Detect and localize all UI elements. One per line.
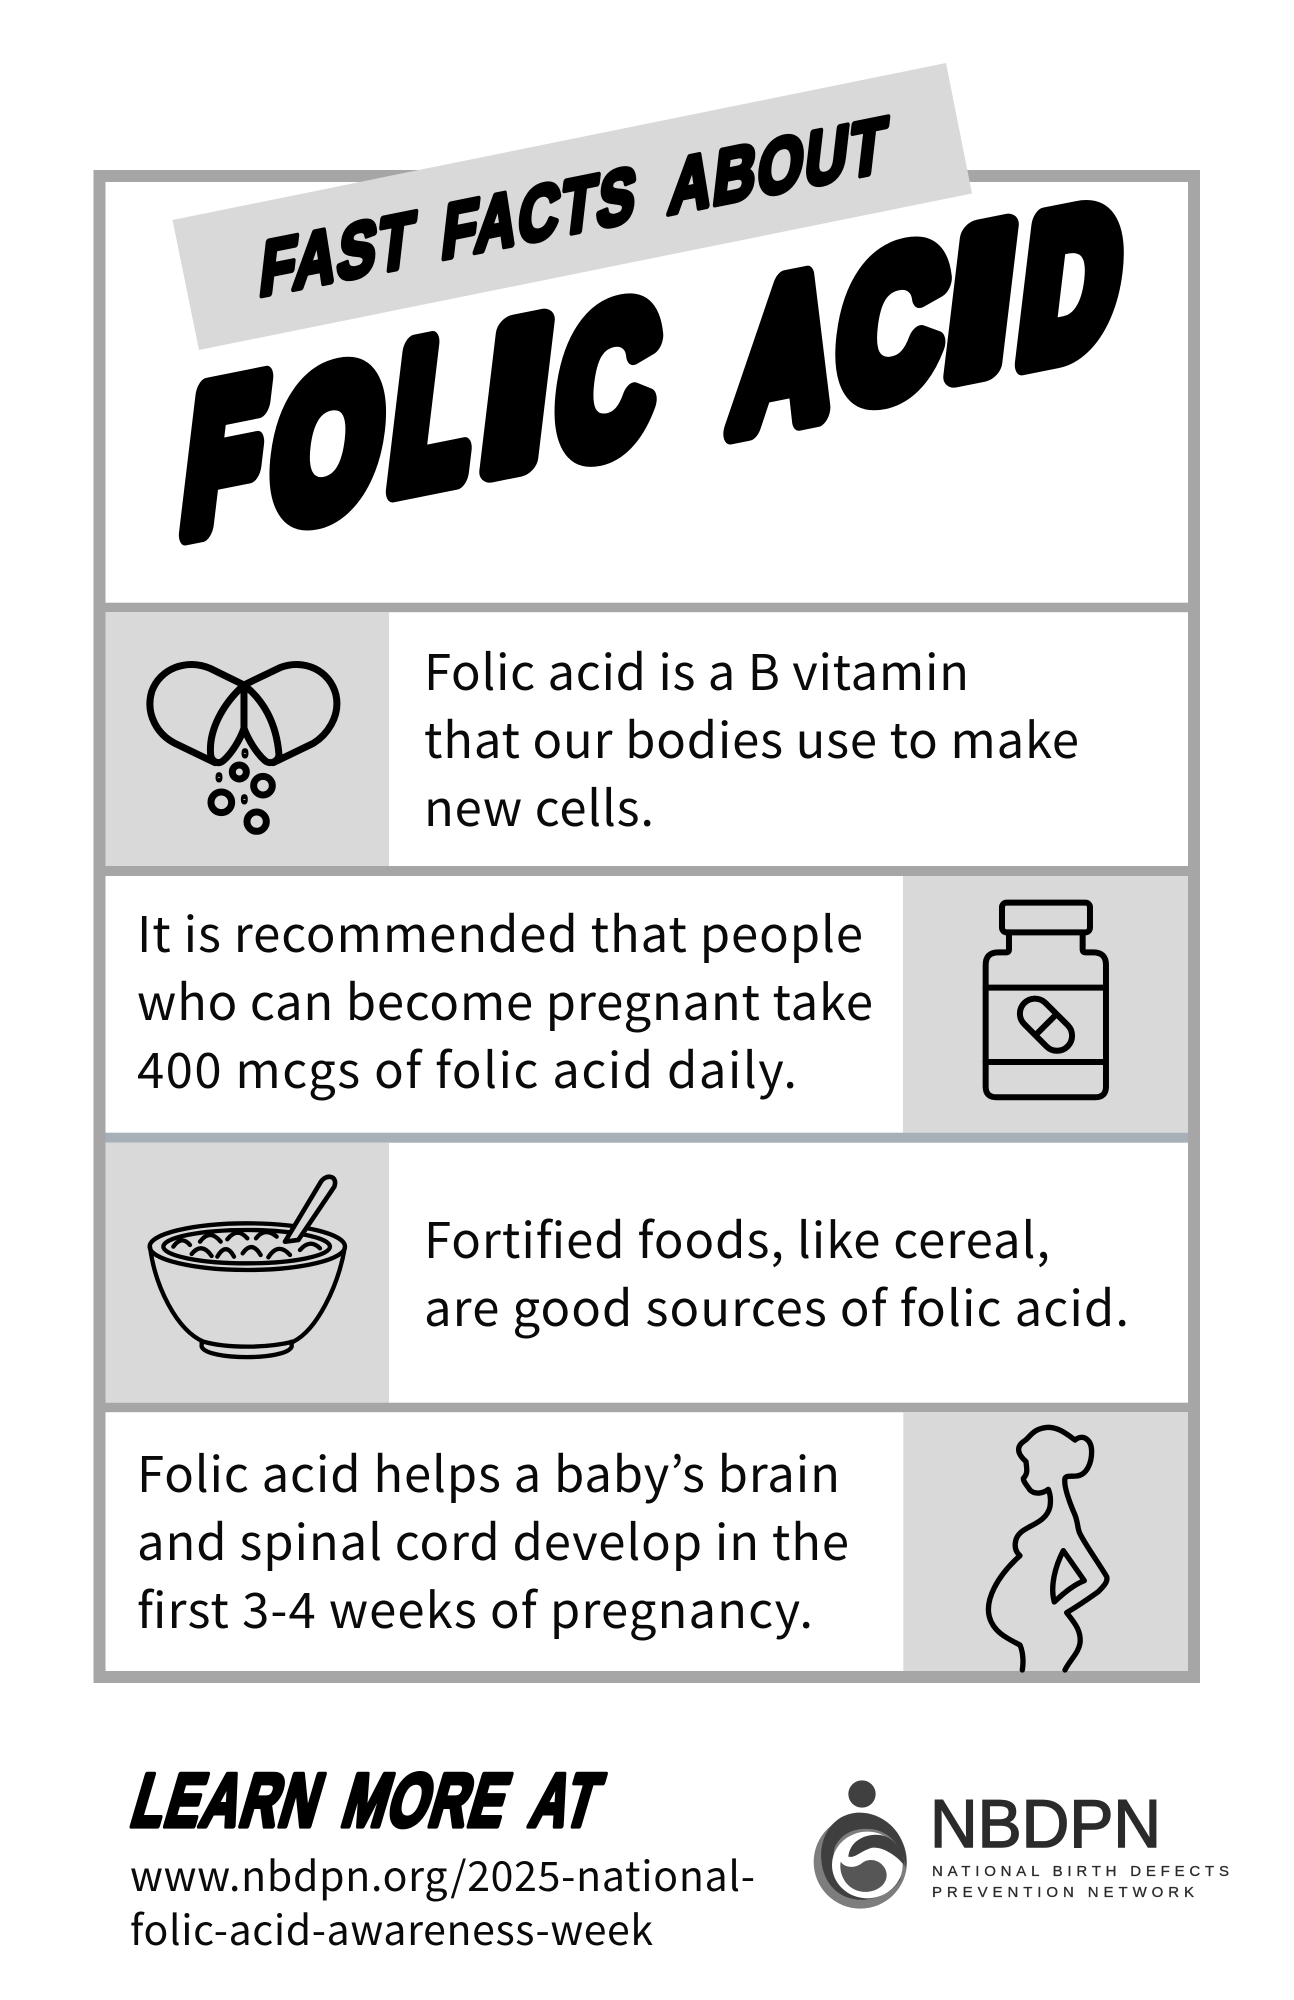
row 4: baby development fact (106, 1403, 1188, 1671)
text: fortified foods: are good sources of folic acid. (424, 1270, 1129, 1341)
footer: learn more (123, 1759, 755, 1957)
heading: folic acid: L (382, 292, 485, 532)
text: fortified foods: Fortified foods, like cereal, (424, 1202, 1050, 1273)
heading: learn more at: MORE (334, 1759, 521, 1843)
heading: learn more at: LEARN (123, 1759, 334, 1843)
text: B vitamin (424, 634, 1079, 841)
icon panel: bottle (903, 876, 1188, 1133)
heading: folic acid (175, 164, 1131, 575)
logo mark (814, 1780, 907, 1909)
banner: fast facts about: FACTS (438, 150, 643, 276)
outer frame (100, 176, 1194, 1677)
heading: learn more at (123, 1759, 613, 1843)
banner: fast facts about: FAST (256, 194, 421, 313)
title panel (172, 63, 1131, 575)
icon: pregnant silhouette (988, 1427, 1107, 1670)
icon panel: bowl (106, 1143, 389, 1403)
logo tagline: PREVENTION NETWORK (932, 1884, 1194, 1901)
icon: pill bottle (986, 903, 1106, 1097)
row 3: fortified foods fact (106, 1133, 1188, 1403)
text: B vitamin: that our bodies use to make (424, 702, 1079, 773)
text: baby development: Folic acid helps a baby’s brain (137, 1436, 840, 1507)
heading: folic acid: F (175, 338, 274, 575)
logo: NBDPN (814, 1780, 1229, 1909)
text: recommended dose: 400 mcgs of folic acid daily. (137, 1032, 797, 1103)
heading: learn more at: AT (522, 1759, 613, 1842)
heading: folic acid: D (1011, 164, 1131, 405)
link: web address (130, 1843, 755, 1957)
link: web address: www.nbdpn.org/2025-national- (130, 1843, 755, 1903)
heading: folic acid: C (547, 261, 667, 502)
text: fortified foods (424, 1202, 1129, 1341)
heading: folic acid: C (828, 202, 956, 445)
row 1: B vitamin fact (106, 603, 1188, 866)
text: recommended dose (137, 896, 873, 1103)
icon: cereal bowl (150, 1177, 345, 1357)
text: B vitamin: new cells. (424, 770, 654, 841)
icon: open capsule (150, 664, 337, 831)
text: recommended dose: It is recommended that people (137, 896, 863, 967)
link: web address: folic-acid-awareness-week (130, 1897, 653, 1957)
text: baby development: and spinal cord develop in the (137, 1504, 849, 1575)
logo tagline: NATIONAL BIRTH DEFECTS (932, 1863, 1229, 1880)
heading: folic acid: I (940, 183, 1022, 417)
banner: fast facts about (172, 63, 972, 350)
text: baby development (137, 1436, 849, 1643)
row 2: recommended dose fact (106, 866, 1188, 1133)
heading: folic acid: O (262, 321, 394, 566)
banner: fast facts about: ABOUT (665, 100, 893, 231)
heading: folic acid: I (476, 278, 558, 512)
icon panel: pregnant person (903, 1412, 1188, 1671)
logo wordmark: NBDPN (930, 1786, 1161, 1862)
text: B vitamin: Folic acid is a B vitamin (424, 634, 969, 705)
text: baby development: first 3-4 weeks of pregnancy. (137, 1572, 813, 1643)
logo tagline (932, 1863, 1229, 1901)
icon panel: capsule (106, 612, 389, 866)
text: recommended dose: who can become pregnant take (137, 964, 873, 1035)
heading: folic acid: A (725, 232, 845, 473)
